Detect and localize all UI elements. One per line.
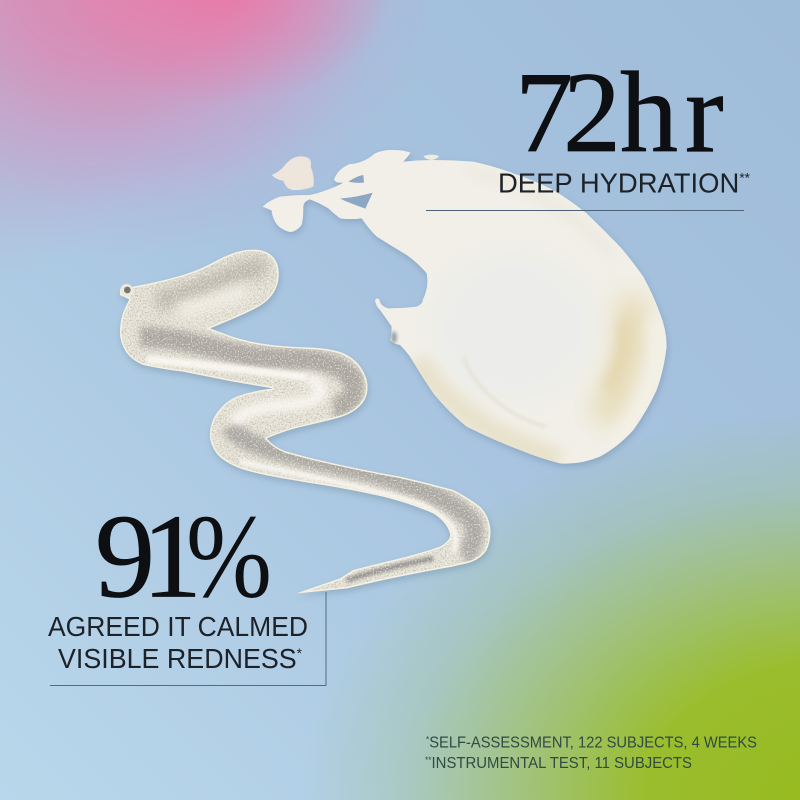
stat: 72hr deep hydration (426, 49, 751, 211)
cream shadow (264, 153, 668, 467)
label visible redness: * (297, 645, 303, 661)
rule (426, 210, 744, 211)
small droplet (423, 155, 439, 160)
footnotes (425, 734, 757, 772)
figure 72hr: 72hr (515, 49, 724, 177)
gel nub (120, 284, 133, 297)
figure 91%: 91 (95, 490, 202, 622)
cream swatch (263, 150, 668, 467)
footnote 2: INSTRUMENTAL TEST, 11 SUBJECTS (432, 755, 692, 772)
cream body (263, 150, 667, 464)
gel swirl (113, 243, 497, 597)
cream shading (412, 288, 666, 463)
footnote 1: * (426, 734, 430, 744)
stat: 91% calmed redness (48, 490, 326, 686)
gel body (120, 250, 490, 593)
corner rule (50, 592, 326, 686)
cream nub (391, 331, 397, 343)
percent sign: % (186, 490, 272, 622)
footnote 1: SELF-ASSESSMENT, 122 SUBJECTS, 4 WEEKS (429, 734, 757, 752)
label deep hydration: ** (739, 170, 751, 186)
cream splash blob (272, 156, 314, 190)
label agreed it calmed: AGREED IT CALMED (48, 611, 308, 642)
footnote 2: ** (425, 755, 432, 765)
label visible redness: VISIBLE REDNESS (58, 643, 303, 674)
gel texture (113, 243, 497, 597)
label deep hydration: DEEP HYDRATION (498, 168, 744, 198)
gel shadow (121, 253, 491, 597)
